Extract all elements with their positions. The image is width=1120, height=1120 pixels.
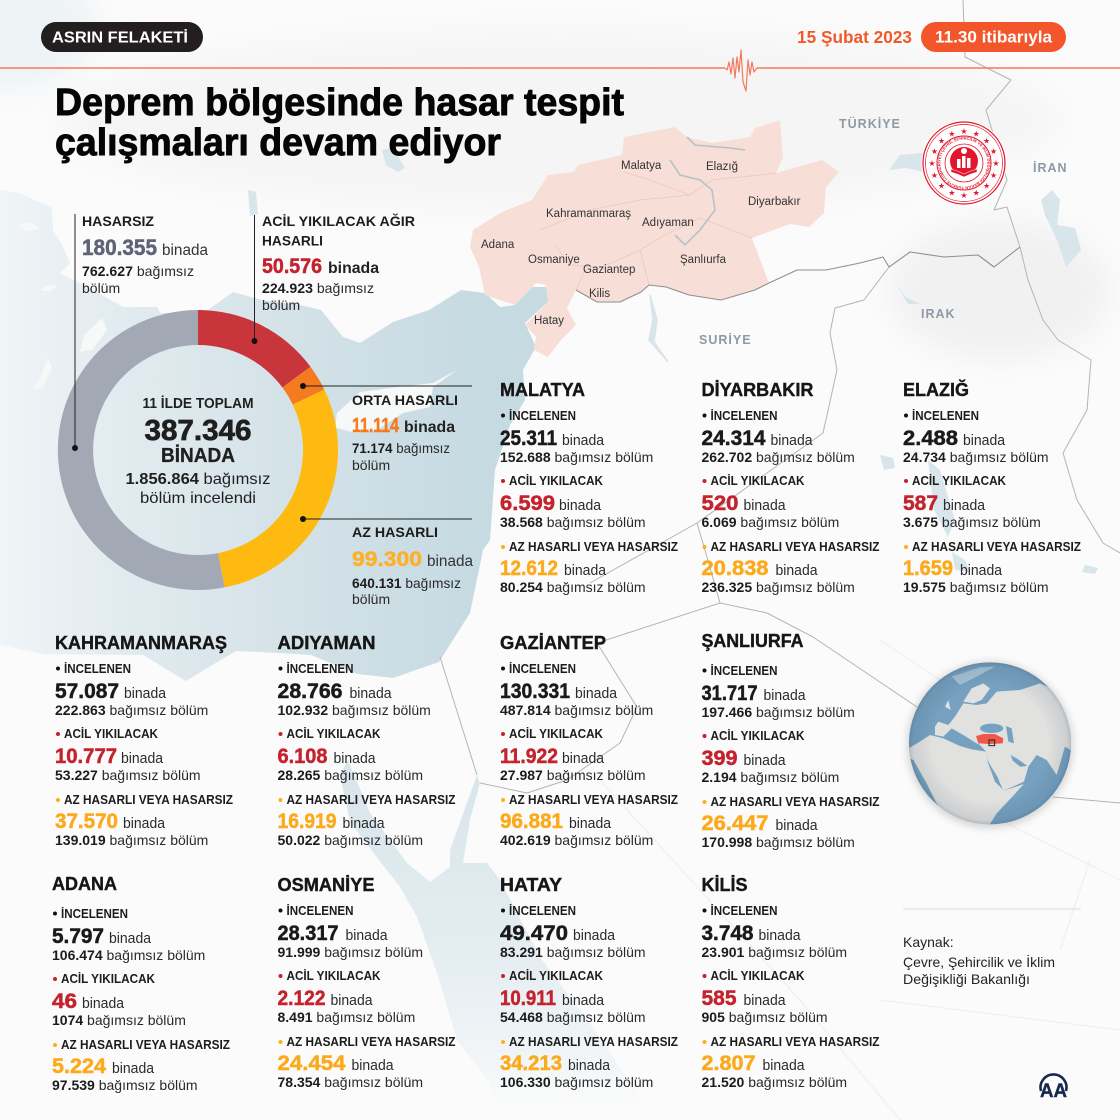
heading: Kilis: KİLİS bbox=[702, 874, 748, 895]
stat: az hasarlı veya hasarsız: 34.213 bbox=[500, 1051, 562, 1075]
stat: az hasarlı veya hasarsız bbox=[278, 1034, 456, 1090]
callout: Az hasarlı: 640.131 bağımsız bbox=[352, 575, 461, 591]
panel: Kahramanmaraş bbox=[55, 632, 233, 848]
panel: Diyarbakır bbox=[702, 379, 880, 595]
heading: Şanlıurfa: ŞANLIURFA bbox=[702, 630, 804, 651]
stat: acil yıkılacak: 11.922 bbox=[500, 744, 558, 768]
callout: Hasarsız bbox=[82, 213, 208, 296]
stat: az hasarlı veya hasarsız bbox=[278, 792, 456, 848]
icon: ministry emblem: ★ bbox=[990, 171, 997, 180]
stat: az hasarlı veya hasarsız: AZ HASARLI VEYA HASARSIZ bbox=[912, 539, 1081, 554]
icon: ministry emblem bbox=[922, 120, 1006, 205]
stat: incelenen: 24.314 bbox=[702, 426, 766, 450]
stat: incelenen: İNCELENEN bbox=[286, 903, 354, 918]
callout: Orta hasarlı bbox=[352, 392, 458, 473]
callout: Acil yıkılacak ağır hasarlı: 224.923 bağımsız bbox=[262, 280, 374, 296]
icon: ministry emblem: ★ bbox=[948, 129, 955, 138]
stat: acil yıkılacak: binada bbox=[943, 498, 986, 514]
callout: Hasarsız: 180.355 bbox=[82, 235, 157, 260]
stat: acil yıkılacak: 2.194 bağımsız bölüm bbox=[702, 769, 839, 785]
stat: az hasarlı veya hasarsız: AZ HASARLI VEYA HASARSIZ bbox=[509, 792, 678, 807]
country and province labels: IRAK bbox=[921, 307, 956, 321]
stat: incelenen: İNCELENEN bbox=[509, 661, 576, 676]
stat: acil yıkılacak: 54.468 bağımsız bölüm bbox=[500, 1009, 646, 1025]
callout: Hasarsız: binada bbox=[162, 242, 208, 259]
stat: acil yıkılacak bbox=[278, 968, 415, 1025]
stat: incelenen: 197.466 bağımsız bölüm bbox=[702, 704, 855, 720]
callout: Acil yıkılacak ağır hasarlı: HASARLI bbox=[262, 232, 323, 248]
stat: incelenen: 2.488 bbox=[903, 426, 958, 450]
stat: incelenen: 130.331 bbox=[500, 679, 570, 703]
country and province labels: Gaziantep bbox=[583, 264, 635, 276]
stat: acil yıkılacak: ACİL YIKILACAK bbox=[912, 473, 1007, 488]
stat: acil yıkılacak: 8.491 bağımsız bölüm bbox=[278, 1009, 415, 1025]
country and province labels: SURİYE bbox=[699, 332, 752, 347]
heading: Adıyaman: ADIYAMAN bbox=[278, 632, 376, 653]
icon: ministry emblem: ★ bbox=[990, 147, 997, 156]
stat: acil yıkılacak: ACİL YIKILACAK bbox=[286, 968, 381, 983]
source text bbox=[903, 934, 1055, 987]
panel: Malatya bbox=[500, 379, 678, 595]
stat: acil yıkılacak: binada bbox=[559, 498, 602, 514]
icon: ministry emblem: ★ bbox=[938, 182, 945, 191]
stat: acil yıkılacak: ACİL YIKILACAK bbox=[710, 728, 805, 743]
stat: incelenen: İNCELENEN bbox=[64, 661, 131, 676]
stat: acil yıkılacak: 905 bağımsız bölüm bbox=[702, 1009, 828, 1025]
country and province labels: Malatya bbox=[621, 160, 662, 172]
stat: az hasarlı veya hasarsız: binada bbox=[762, 1058, 805, 1074]
stat: az hasarlı veya hasarsız: 21.520 bağımsız bölüm bbox=[702, 1074, 847, 1090]
stat: acil yıkılacak bbox=[702, 728, 839, 785]
stat: incelenen: 23.901 bağımsız bölüm bbox=[702, 944, 847, 960]
stat: acil yıkılacak: 6.108 bbox=[278, 744, 328, 768]
icon: ministry emblem: TÜRKİYE CUMHURİYETİ ÇEVRE, ŞEHİRCİLİK VE İKLİM DEĞİŞİKLİĞİ BAKANLIĞI bbox=[938, 136, 990, 190]
stat: acil yıkılacak: 1074 bağımsız bölüm bbox=[52, 1012, 186, 1028]
stat: az hasarlı veya hasarsız: 139.019 bağımsız bölüm bbox=[55, 832, 208, 848]
donut centre text: 11 İLDE TOPLAM bbox=[142, 395, 254, 412]
stat: incelenen bbox=[702, 903, 847, 960]
stat: acil yıkılacak bbox=[52, 971, 186, 1028]
icon: AA logo: AA bbox=[1040, 1081, 1067, 1102]
stat: incelenen: 57.087 bbox=[55, 679, 119, 703]
stat: az hasarlı veya hasarsız: AZ HASARLI VEYA HASARSIZ bbox=[509, 1034, 678, 1049]
icon: ministry emblem: ★ bbox=[928, 159, 936, 168]
callout: Acil yıkılacak ağır hasarlı: bölüm bbox=[262, 297, 300, 313]
stat: incelenen: binada bbox=[350, 686, 392, 702]
icon: ministry emblem: ★ bbox=[948, 189, 955, 198]
panel: Osmaniye bbox=[278, 874, 456, 1090]
stat: acil yıkılacak: 10.911 bbox=[500, 986, 556, 1010]
stat: acil yıkılacak bbox=[500, 473, 646, 530]
panel: Şanlıurfa bbox=[702, 630, 880, 850]
panel: Adıyaman bbox=[278, 632, 456, 848]
stat: acil yıkılacak: binada bbox=[82, 996, 125, 1012]
callout: Hasarsız: HASARSIZ bbox=[82, 213, 154, 229]
stat: incelenen: binada bbox=[109, 931, 152, 947]
stat: acil yıkılacak: binada bbox=[562, 993, 605, 1009]
donut centre text bbox=[126, 395, 270, 507]
callout: Orta hasarlı: bölüm bbox=[352, 457, 390, 473]
stat: az hasarlı veya hasarsız bbox=[500, 1034, 678, 1090]
stat: acil yıkılacak: 53.227 bağımsız bölüm bbox=[55, 767, 201, 783]
stat: acil yıkılacak: 46 bbox=[52, 989, 77, 1013]
stat: acil yıkılacak: 6.069 bağımsız bölüm bbox=[702, 514, 839, 530]
stat: az hasarlı veya hasarsız: AZ HASARLI VEYA HASARSIZ bbox=[286, 792, 456, 807]
stat: az hasarlı veya hasarsız: AZ HASARLI VEYA HASARSIZ bbox=[509, 539, 678, 554]
stat: incelenen: binada bbox=[770, 433, 813, 449]
segment: Acil yıkılacak bbox=[198, 310, 310, 388]
stat: incelenen: binada bbox=[124, 686, 167, 702]
stat: az hasarlı veya hasarsız: binada bbox=[568, 1058, 611, 1074]
country and province labels bbox=[481, 116, 1068, 347]
stat: incelenen: 5.797 bbox=[52, 924, 104, 948]
stat: az hasarlı veya hasarsız bbox=[500, 539, 678, 595]
stat: incelenen: 102.932 bağımsız bölüm bbox=[278, 702, 431, 718]
stat: incelenen bbox=[278, 903, 423, 960]
stat: acil yıkılacak bbox=[903, 473, 1041, 530]
panel: Hatay bbox=[500, 874, 678, 1090]
header divider with seismograph bbox=[0, 50, 1120, 91]
callout: Hasarsız: bölüm bbox=[82, 280, 120, 296]
stat: incelenen bbox=[278, 661, 431, 718]
stat: az hasarlı veya hasarsız: AZ HASARLI VEYA HASARSIZ bbox=[61, 1037, 230, 1052]
stat: az hasarlı veya hasarsız: AZ HASARLI VEYA HASARSIZ bbox=[710, 794, 880, 809]
stat: incelenen: 487.814 bağımsız bölüm bbox=[500, 702, 653, 718]
stat: az hasarlı veya hasarsız: AZ HASARLI VEYA HASARSIZ bbox=[286, 1034, 456, 1049]
stat: acil yıkılacak: 2.122 bbox=[278, 986, 326, 1010]
stat: az hasarlı veya hasarsız: 78.354 bağımsız bölüm bbox=[278, 1074, 423, 1090]
stat: acil yıkılacak: 3.675 bağımsız bölüm bbox=[903, 514, 1041, 530]
stat: acil yıkılacak: ACİL YIKILACAK bbox=[509, 473, 604, 488]
country and province labels: TÜRKİYE bbox=[839, 116, 901, 131]
stat: incelenen: 28.766 bbox=[278, 679, 343, 703]
tag: Asrın Felaketi: ASRIN FELAKETİ bbox=[52, 28, 188, 46]
stat: incelenen: İNCELENEN bbox=[710, 903, 778, 918]
stat: az hasarlı veya hasarsız: 26.447 bbox=[702, 811, 769, 835]
stat: acil yıkılacak: ACİL YIKILACAK bbox=[286, 726, 381, 741]
stat: az hasarlı veya hasarsız: 24.454 bbox=[278, 1051, 346, 1075]
stat: az hasarlı veya hasarsız: 236.325 bağımsız bölüm bbox=[702, 579, 855, 595]
sea: Red Sea and gulfs bbox=[340, 760, 650, 1120]
icon: ministry emblem: ★ bbox=[983, 136, 990, 145]
donut centre text: bölüm incelendi bbox=[140, 490, 256, 507]
donut centre text: 387.346 bbox=[144, 415, 252, 447]
stat: incelenen: İNCELENEN bbox=[286, 661, 354, 676]
stat: acil yıkılacak: 520 bbox=[702, 491, 739, 515]
lakes and rivers bbox=[248, 148, 1098, 574]
country and province labels: Kahramanmaraş bbox=[546, 208, 631, 220]
stat: az hasarlı veya hasarsız: 106.330 bağımsız bölüm bbox=[500, 1074, 653, 1090]
stat: az hasarlı veya hasarsız: 19.575 bağımsız bölüm bbox=[903, 579, 1049, 595]
stat: incelenen: 25.311 bbox=[500, 426, 557, 450]
stat: az hasarlı veya hasarsız: binada bbox=[342, 816, 385, 832]
stat: incelenen: İNCELENEN bbox=[710, 663, 778, 678]
stat: acil yıkılacak: 38.568 bağımsız bölüm bbox=[500, 514, 646, 530]
stat: incelenen bbox=[52, 906, 205, 963]
stat: acil yıkılacak: 27.987 bağımsız bölüm bbox=[500, 767, 646, 783]
icon: ministry emblem: ★ bbox=[938, 136, 945, 145]
stat: incelenen: binada bbox=[963, 433, 1006, 449]
stat: az hasarlı veya hasarsız: 96.881 bbox=[500, 809, 563, 833]
stat: acil yıkılacak: binada bbox=[121, 751, 164, 767]
stat: incelenen: İNCELENEN bbox=[509, 408, 576, 423]
stat: az hasarlı veya hasarsız: 2.807 bbox=[702, 1051, 756, 1075]
stat: az hasarlı veya hasarsız: binada bbox=[564, 563, 607, 579]
stat: acil yıkılacak bbox=[55, 726, 201, 783]
stat: acil yıkılacak: ACİL YIKILACAK bbox=[509, 968, 604, 983]
stat: incelenen: 3.748 bbox=[702, 921, 754, 945]
source text: Değişikliği Bakanlığı bbox=[903, 971, 1030, 987]
stat: acil yıkılacak: ACİL YIKILACAK bbox=[509, 726, 604, 741]
stat: acil yıkılacak bbox=[278, 726, 423, 783]
stat: acil yıkılacak: ACİL YIKILACAK bbox=[710, 473, 805, 488]
stat: az hasarlı veya hasarsız: 5.224 bbox=[52, 1054, 106, 1078]
panel: Elazığ bbox=[903, 379, 1081, 595]
callout: Az hasarlı: AZ HASARLI bbox=[352, 524, 438, 540]
callout: Acil yıkılacak ağır hasarlı: 50.576 bbox=[262, 254, 322, 278]
country and province labels: Hatay bbox=[534, 315, 564, 327]
icon: ministry emblem: ★ bbox=[983, 182, 990, 191]
source text: Çevre, Şehircilik ve İklim bbox=[903, 953, 1055, 970]
stat: az hasarlı veya hasarsız: binada bbox=[352, 1058, 394, 1074]
stat: az hasarlı veya hasarsız: binada bbox=[123, 816, 166, 832]
callout: Hasarsız: 762.627 bağımsız bbox=[82, 263, 194, 279]
title: çalışmaları devam ediyor bbox=[55, 122, 501, 164]
stat: az hasarlı veya hasarsız: binada bbox=[112, 1061, 155, 1077]
date: 15 Şubat 2023 bbox=[797, 27, 912, 47]
stat: az hasarlı veya hasarsız bbox=[500, 792, 678, 848]
icon: ministry emblem: ★ bbox=[992, 159, 1000, 168]
stat: incelenen: binada bbox=[758, 928, 801, 944]
icon: ministry emblem: ★ bbox=[973, 189, 980, 198]
stat: incelenen: 28.317 bbox=[278, 921, 339, 945]
borders bbox=[576, 247, 1020, 302]
stat: az hasarlı veya hasarsız: 402.619 bağımsız bölüm bbox=[500, 832, 653, 848]
stat: az hasarlı veya hasarsız: 37.570 bbox=[55, 809, 118, 833]
stat: az hasarlı veya hasarsız bbox=[702, 794, 880, 850]
panel: Kilis bbox=[702, 874, 880, 1090]
callout: Orta hasarlı: 11.114 bbox=[352, 415, 400, 437]
stat: acil yıkılacak: ACİL YIKILACAK bbox=[61, 971, 156, 986]
stat: az hasarlı veya hasarsız: 50.022 bağımsız bölüm bbox=[278, 832, 423, 848]
stat: az hasarlı veya hasarsız: 1.659 bbox=[903, 556, 953, 580]
stat: acil yıkılacak: ACİL YIKILACAK bbox=[64, 726, 159, 741]
callout: Az hasarlı: 99.300 bbox=[352, 547, 422, 571]
stat: incelenen bbox=[500, 661, 653, 718]
stat: incelenen: binada bbox=[575, 686, 618, 702]
stat: acil yıkılacak: 28.265 bağımsız bölüm bbox=[278, 767, 423, 783]
stat: acil yıkılacak: binada bbox=[562, 751, 605, 767]
time pill: 11.30 itibarıyla bbox=[935, 28, 1053, 46]
heading: Diyarbakır: DİYARBAKIR bbox=[702, 379, 814, 400]
stat: az hasarlı veya hasarsız: AZ HASARLI VEYA HASARSIZ bbox=[710, 1034, 880, 1049]
stat: az hasarlı veya hasarsız: binada bbox=[960, 563, 1003, 579]
heading: Adana: ADANA bbox=[52, 873, 117, 894]
country and province labels: Elazığ bbox=[706, 161, 738, 173]
stat: az hasarlı veya hasarsız: 16.919 bbox=[278, 809, 337, 833]
stat: acil yıkılacak: binada bbox=[744, 993, 786, 1009]
icon: ministry emblem: ★ bbox=[973, 129, 980, 138]
stat: acil yıkılacak: 399 bbox=[702, 746, 738, 770]
stat: az hasarlı veya hasarsız bbox=[702, 539, 880, 595]
stat: incelenen: 31.717 bbox=[702, 681, 758, 705]
stat: acil yıkılacak bbox=[702, 968, 828, 1025]
stat: incelenen: 222.863 bağımsız bölüm bbox=[55, 702, 208, 718]
callout: Orta hasarlı: 71.174 bağımsız bbox=[352, 440, 450, 456]
stat: az hasarlı veya hasarsız: AZ HASARLI VEYA HASARSIZ bbox=[64, 792, 233, 807]
stat: acil yıkılacak bbox=[702, 473, 839, 530]
icon: ministry emblem: ★ bbox=[931, 171, 938, 180]
country and province labels: İRAN bbox=[1033, 160, 1068, 175]
stat: az hasarlı veya hasarsız: binada bbox=[776, 563, 818, 579]
donut chart bbox=[58, 310, 338, 590]
stat: az hasarlı veya hasarsız: binada bbox=[776, 818, 818, 834]
segment: Az hasarlı bbox=[218, 390, 338, 587]
heading: Gaziantep: GAZİANTEP bbox=[500, 632, 606, 653]
heading: Malatya: MALATYA bbox=[500, 379, 585, 400]
stat: incelenen: 262.702 bağımsız bölüm bbox=[702, 449, 855, 465]
sea: Mediterranean bbox=[0, 190, 550, 681]
stat: incelenen: binada bbox=[573, 928, 616, 944]
source text: Kaynak: bbox=[903, 934, 954, 950]
stat: incelenen: 152.688 bağımsız bölüm bbox=[500, 449, 653, 465]
stat: incelenen: 24.734 bağımsız bölüm bbox=[903, 449, 1049, 465]
heading: Kahramanmaraş: KAHRAMANMARAŞ bbox=[55, 632, 227, 653]
stat: az hasarlı veya hasarsız: AZ HASARLI VEYA HASARSIZ bbox=[710, 539, 880, 554]
time pill bbox=[921, 22, 1066, 52]
callout: Az hasarlı: binada bbox=[427, 553, 473, 570]
heading: Elazığ: ELAZIĞ bbox=[903, 379, 969, 400]
stat: incelenen bbox=[500, 408, 653, 465]
icon: ministry emblem: ★ bbox=[960, 127, 968, 136]
icon: ministry emblem: ★ bbox=[960, 191, 968, 200]
stat: acil yıkılacak: binada bbox=[744, 753, 786, 769]
stat: acil yıkılacak: ACİL YIKILACAK bbox=[710, 968, 805, 983]
panel: Gaziantep bbox=[500, 632, 678, 848]
heading: Osmaniye: OSMANİYE bbox=[278, 874, 374, 895]
stat: incelenen: 49.470 bbox=[500, 921, 568, 945]
stat: az hasarlı veya hasarsız: 12.612 bbox=[500, 556, 558, 580]
segment: Hasarsız bbox=[58, 310, 225, 590]
stat: acil yıkılacak: binada bbox=[334, 751, 376, 767]
tag: Asrın Felaketi bbox=[41, 22, 203, 52]
stat: incelenen bbox=[702, 408, 855, 465]
country and province labels: Adana bbox=[481, 239, 515, 251]
stat: incelenen bbox=[55, 661, 208, 718]
country and province labels: Osmaniye bbox=[528, 254, 580, 266]
stat: az hasarlı veya hasarsız bbox=[903, 539, 1081, 595]
stat: incelenen: 91.999 bağımsız bölüm bbox=[278, 944, 423, 960]
donut centre text: BİNADA bbox=[161, 444, 235, 467]
globe locator bbox=[900, 662, 1087, 828]
stat: incelenen bbox=[903, 408, 1049, 465]
stat: az hasarlı veya hasarsız: 80.254 bağımsız bölüm bbox=[500, 579, 646, 595]
pink region: affected provinces bbox=[470, 120, 839, 357]
callout: Az hasarlı: bölüm bbox=[352, 591, 390, 607]
heading: Hatay: HATAY bbox=[500, 874, 563, 895]
stat: incelenen: İNCELENEN bbox=[710, 408, 778, 423]
stat: incelenen: 83.291 bağımsız bölüm bbox=[500, 944, 646, 960]
stat: acil yıkılacak: 585 bbox=[702, 986, 737, 1010]
title: Deprem bölgesinde hasar tespit bbox=[55, 82, 624, 124]
country and province labels: Şanlıurfa bbox=[680, 254, 727, 266]
stat: incelenen: binada bbox=[764, 688, 806, 704]
source divider bbox=[903, 908, 1081, 910]
leader lines bbox=[72, 214, 472, 522]
stat: az hasarlı veya hasarsız: 170.998 bağımsız bölüm bbox=[702, 834, 855, 850]
stat: acil yıkılacak: binada bbox=[744, 498, 786, 514]
stat: acil yıkılacak bbox=[500, 726, 646, 783]
stat: az hasarlı veya hasarsız bbox=[702, 1034, 880, 1090]
segment: Orta hasarlı bbox=[282, 367, 324, 405]
stat: acil yıkılacak: 587 bbox=[903, 491, 938, 515]
callout: Orta hasarlı: binada bbox=[404, 419, 455, 436]
title bbox=[55, 82, 624, 164]
stat: acil yıkılacak: binada bbox=[330, 993, 373, 1009]
panel: Adana bbox=[52, 873, 230, 1093]
icon: ministry emblem: ★ bbox=[931, 147, 938, 156]
stat: az hasarlı veya hasarsız: binada bbox=[569, 816, 612, 832]
stat: incelenen bbox=[500, 903, 646, 960]
islands bbox=[17, 222, 457, 433]
stat: acil yıkılacak bbox=[500, 968, 646, 1025]
stat: az hasarlı veya hasarsız: 97.539 bağımsız bölüm bbox=[52, 1077, 198, 1093]
stat: az hasarlı veya hasarsız bbox=[55, 792, 233, 848]
callout: Orta hasarlı: ORTA HASARLI bbox=[352, 392, 458, 408]
stat: incelenen: binada bbox=[562, 433, 605, 449]
country and province labels: Diyarbakır bbox=[748, 196, 801, 208]
callout: Acil yıkılacak ağır hasarlı bbox=[262, 212, 415, 313]
callout: Acil yıkılacak ağır hasarlı: binada bbox=[328, 260, 379, 277]
stat: incelenen bbox=[702, 663, 855, 720]
stat: incelenen: İNCELENEN bbox=[61, 906, 128, 921]
stat: acil yıkılacak: 6.599 bbox=[500, 491, 555, 515]
country and province labels: Kilis bbox=[589, 288, 610, 300]
stat: incelenen: İNCELENEN bbox=[509, 903, 576, 918]
stat: az hasarlı veya hasarsız: 20.838 bbox=[702, 556, 769, 580]
donut centre text: 1.856.864 bağımsız bbox=[126, 471, 270, 488]
stat: incelenen: İNCELENEN bbox=[912, 408, 979, 423]
callout: Acil yıkılacak ağır hasarlı: ACİL YIKILACAK AĞIR bbox=[262, 212, 415, 229]
stat: acil yıkılacak: 10.777 bbox=[55, 744, 117, 768]
callout: Az hasarlı bbox=[352, 524, 473, 607]
stat: incelenen: 106.474 bağımsız bölüm bbox=[52, 947, 205, 963]
stat: incelenen: binada bbox=[346, 928, 388, 944]
stat: az hasarlı veya hasarsız bbox=[52, 1037, 230, 1093]
country and province labels: Adıyaman bbox=[642, 217, 694, 229]
